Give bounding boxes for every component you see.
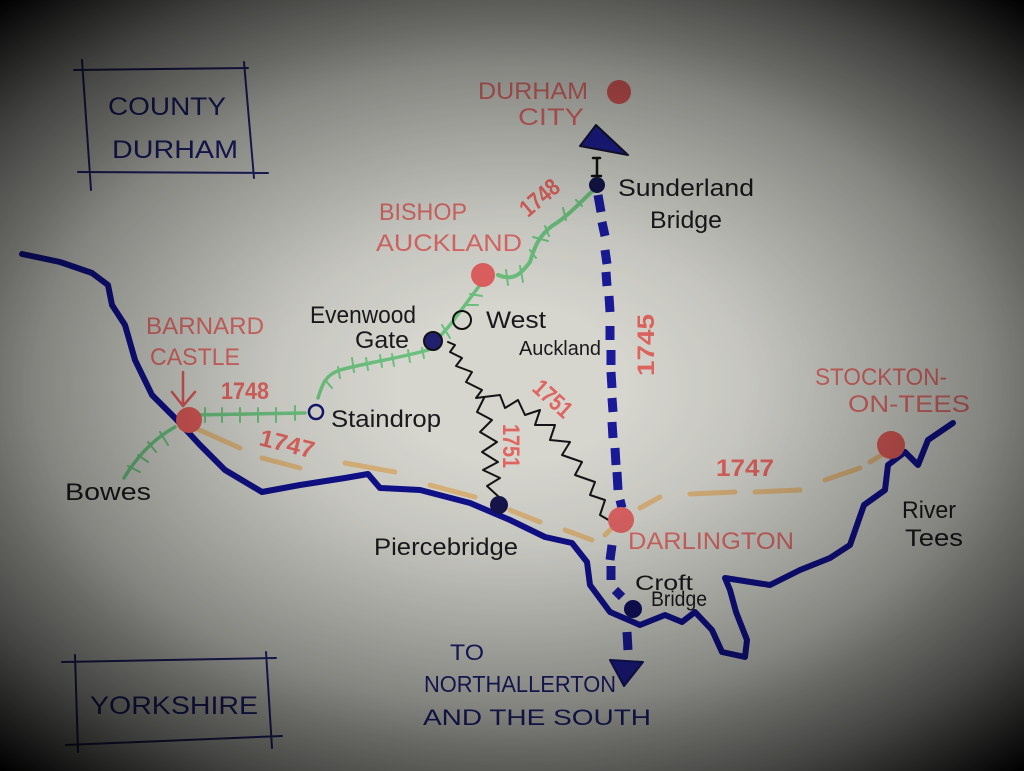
black place labels: Croft	[635, 572, 693, 595]
black place labels: West	[486, 307, 546, 334]
black place labels	[65, 175, 963, 611]
red labels: CASTLE	[150, 344, 240, 371]
red labels: DURHAM	[478, 78, 588, 105]
destination label: TO	[450, 640, 484, 665]
black place labels: Bowes	[65, 479, 151, 506]
black place labels: Auckland	[519, 338, 601, 360]
road: blue dashed 1745 Great North Road	[598, 195, 628, 650]
red labels: BARNARD	[146, 313, 264, 340]
road: 1751 Evenwood Gate to Darlington (zigzag)	[448, 342, 612, 522]
red labels: DARLINGTON	[628, 528, 794, 555]
year labels: 1751	[527, 374, 578, 424]
black place labels: Tees	[905, 525, 963, 552]
black place labels: Gate	[355, 327, 409, 354]
black place labels: Bridge	[651, 588, 707, 611]
destination label: AND THE SOUTH	[423, 705, 651, 730]
black place labels: Piercebridge	[374, 534, 518, 561]
bridge and village markers	[309, 177, 642, 618]
red labels: STOCKTON-	[815, 364, 947, 391]
road: green to Bowes	[124, 427, 175, 478]
destination label: NORTHALLERTON	[424, 671, 616, 697]
year labels: 1747	[716, 455, 774, 482]
river Tees	[22, 254, 953, 657]
road: tan 1747 turnpike	[195, 428, 890, 540]
arrowhead: south	[610, 660, 643, 686]
box: County Durham: DURHAM	[112, 136, 238, 164]
destination label	[423, 640, 651, 730]
road: 1751 to Piercebridge (zigzag)	[477, 398, 500, 498]
year labels: 1751	[497, 424, 524, 468]
box: Yorkshire: YORKSHIRE	[90, 692, 258, 720]
box: Yorkshire	[62, 652, 282, 752]
black place labels: River	[902, 497, 956, 524]
box: County Durham: COUNTY	[108, 93, 226, 121]
year labels: 1745	[633, 314, 660, 376]
year labels: 1747	[257, 425, 317, 464]
arrowhead: north	[580, 125, 628, 176]
black place labels: Staindrop	[331, 406, 441, 433]
red labels	[146, 78, 970, 555]
road: green 1748 Bishop Auckland to Sunderland Bridge	[498, 187, 597, 285]
red labels: BISHOP	[379, 199, 467, 226]
black place labels: Bridge	[650, 207, 722, 234]
year labels	[221, 174, 774, 482]
red labels: CITY	[518, 104, 584, 131]
arrow: Barnard Castle pointer	[172, 372, 195, 406]
black place labels: Sunderland	[618, 175, 754, 202]
red labels: ON-TEES	[848, 391, 970, 418]
box: County Durham	[74, 60, 268, 190]
year labels: 1748	[515, 174, 566, 223]
town markers	[176, 80, 905, 533]
red labels: AUCKLAND	[376, 230, 522, 257]
black place labels: Evenwood	[310, 302, 416, 329]
year labels: 1748	[221, 378, 269, 405]
road: green 1748 Barnard Castle to Evenwood Gate	[192, 285, 482, 422]
